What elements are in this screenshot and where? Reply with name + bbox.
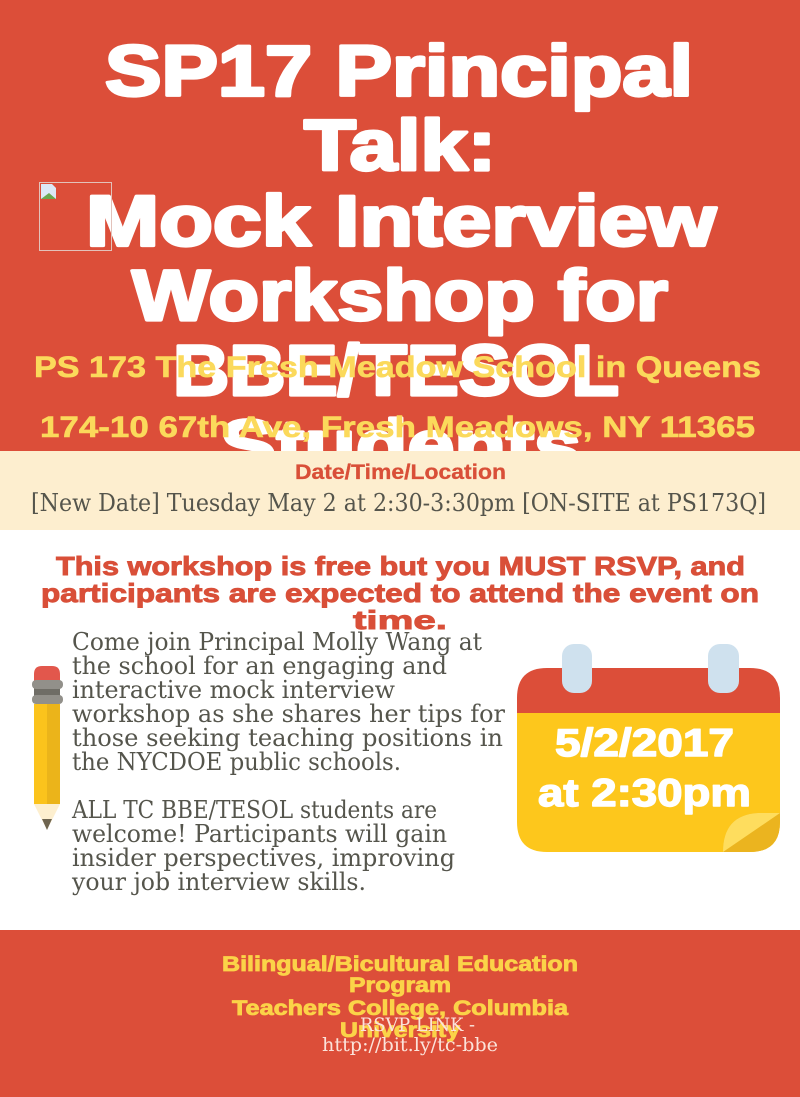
footer program name: Program [349, 974, 451, 997]
body text [71, 628, 506, 896]
calendar date: at 2:30pm [538, 772, 751, 815]
panel: date band [0, 451, 800, 530]
body text: welcome! Participants will gain [72, 820, 447, 848]
RSVP notice: This workshop is free but you MUST RSVP, and [56, 551, 745, 581]
icon: calendar [517, 644, 780, 852]
body text: those seeking teaching positions in [72, 724, 503, 752]
footer program name: University [340, 1019, 460, 1042]
body text: Come join Principal Molly Wang at [72, 628, 482, 656]
body text: insider perspectives, improving [72, 844, 455, 872]
footer program name: Teachers College, Columbia [232, 997, 568, 1020]
body text: ALL TC BBE/TESOL students are [71, 796, 437, 824]
school name and address: 174-10 67th Ave, Fresh Meadows, NY 11365 [40, 411, 755, 444]
RSVP link: RSVP LINK - [360, 1014, 475, 1036]
title: SP17 Principal [105, 32, 693, 112]
RSVP notice: participants are expected to attend the event on [41, 578, 759, 608]
title: BBE/TESOL [173, 332, 619, 411]
RSVP link [322, 1014, 498, 1056]
body text: your job interview skills. [71, 868, 366, 896]
icon: pencil [32, 666, 63, 830]
date heading: Date/Time/Location [295, 461, 506, 484]
RSVP link: http://bit.ly/tc-bbe [322, 1034, 498, 1056]
panel: red footer [0, 930, 800, 1097]
title: Workshop for [132, 257, 668, 336]
title [86, 32, 717, 486]
panel: red header [0, 0, 800, 452]
broken image placeholder [40, 182, 112, 250]
title: Mock Interview [86, 182, 717, 262]
body text: interactive mock interview [72, 676, 395, 704]
RSVP notice: time. [353, 605, 447, 635]
calendar date: 5/2/2017 [555, 722, 734, 765]
footer program name [222, 953, 578, 1042]
school name and address: PS 173 The Fresh Meadow School in Queens [34, 351, 761, 384]
RSVP notice [41, 551, 759, 635]
body text: the NYCDOE public schools. [72, 748, 401, 776]
title: Students [220, 407, 581, 486]
body text: workshop as she shares her tips for [72, 700, 506, 728]
title: Talk: [304, 107, 496, 186]
body text: the school for an engaging and [72, 652, 447, 680]
calendar date [538, 722, 751, 815]
school name and address [34, 351, 761, 444]
footer program name: Bilingual/Bicultural Education [222, 953, 578, 976]
